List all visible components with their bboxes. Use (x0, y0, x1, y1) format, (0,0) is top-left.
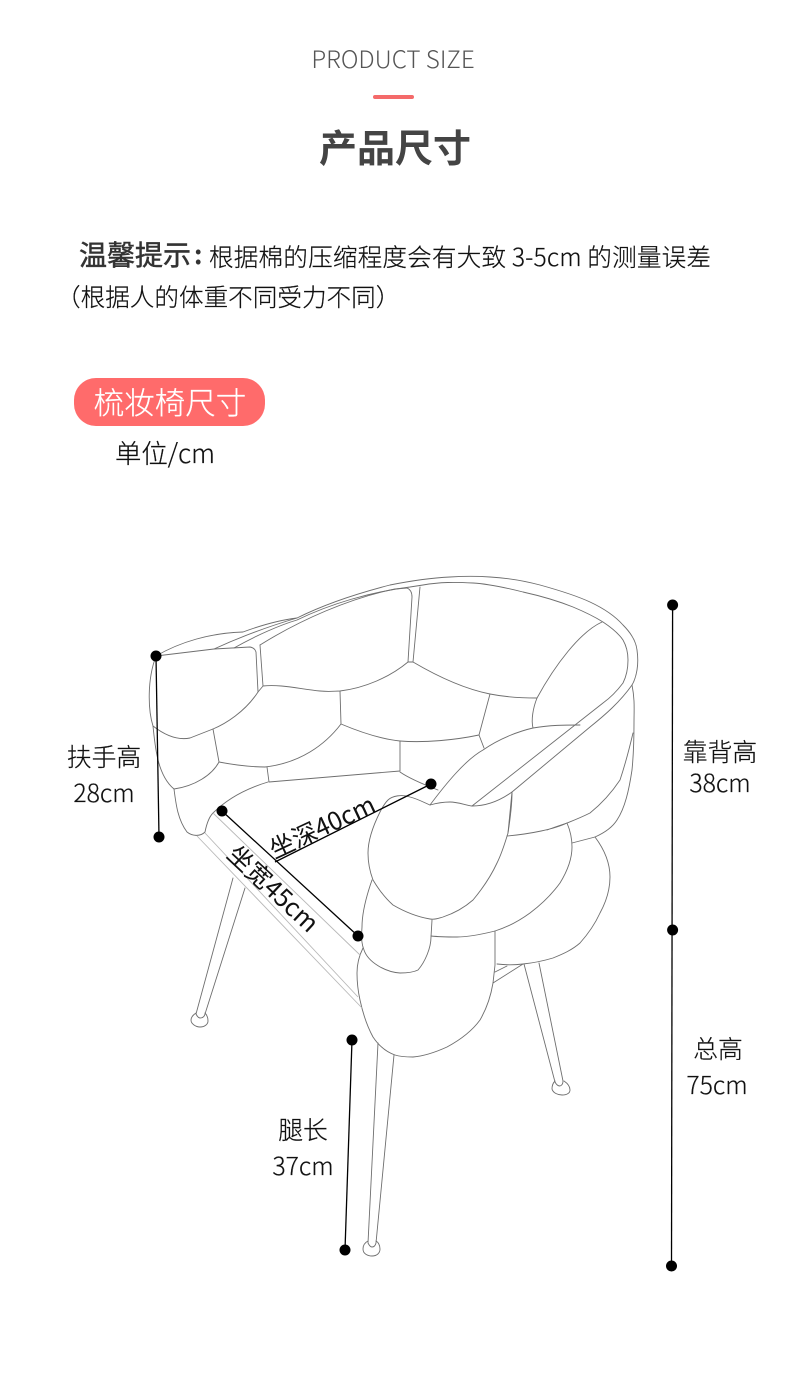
notice text: : (194, 235, 202, 272)
dimension: armrest height (67, 650, 164, 842)
unit label: 单位/cm (115, 432, 215, 471)
category badge: 梳妆椅尺寸 (94, 379, 246, 423)
inner back rim (234, 582, 628, 806)
dimension: backrest height and total height: 38cm (689, 764, 751, 800)
notice text (56, 234, 711, 314)
notice text: 温馨提示 (79, 234, 191, 274)
dimension: seat width (216, 806, 364, 942)
front arm cushion (368, 793, 512, 919)
dimension: leg length: 腿长 (278, 1111, 328, 1147)
title: 产品尺寸 (319, 118, 471, 173)
dimension: backrest height and total height: 总高 (693, 1030, 743, 1066)
notice text: 根据棉的压缩程度会有大致 3-5cm 的测量误差 (209, 238, 711, 274)
section subtitle: PRODUCT SIZE (311, 40, 475, 75)
dimension: leg length (272, 1034, 358, 1256)
dimension: leg length: 37cm (272, 1147, 334, 1183)
right armrest top (430, 725, 580, 805)
seat front frame (213, 813, 360, 955)
accent bar (373, 95, 414, 99)
dimension: armrest height: 扶手高 (67, 738, 141, 774)
back cushion right (413, 587, 602, 698)
connectors under seat (495, 966, 507, 972)
rear upper cushion (595, 685, 634, 837)
dimension: backrest height and total height (666, 600, 757, 1272)
right rear leg (524, 963, 570, 1095)
dimension: seat width: 坐宽45cm (220, 836, 328, 940)
back cushion middle row (340, 691, 490, 742)
bottom front cushion (357, 931, 495, 1057)
outer back rim (214, 576, 638, 806)
middle front cushion (362, 880, 432, 973)
dimension: seat depth: 坐深40cm (263, 786, 381, 866)
side cushion row 2 (431, 823, 572, 937)
dimension: backrest height and total height: 75cm (686, 1066, 748, 1102)
notice text: （根据人的体重不同受力不同） (56, 278, 400, 314)
left rear leg (191, 878, 245, 1027)
chair line drawing (149, 576, 638, 1256)
dimension: armrest height: 28cm (73, 774, 135, 810)
front leg (363, 1043, 394, 1256)
dimension: backrest height and total height: 靠背高 (683, 733, 757, 769)
back cushion left (260, 588, 413, 662)
left armrest lower cushion (153, 726, 219, 789)
left armrest cushion (156, 618, 297, 656)
dimension: seat depth (263, 778, 436, 866)
